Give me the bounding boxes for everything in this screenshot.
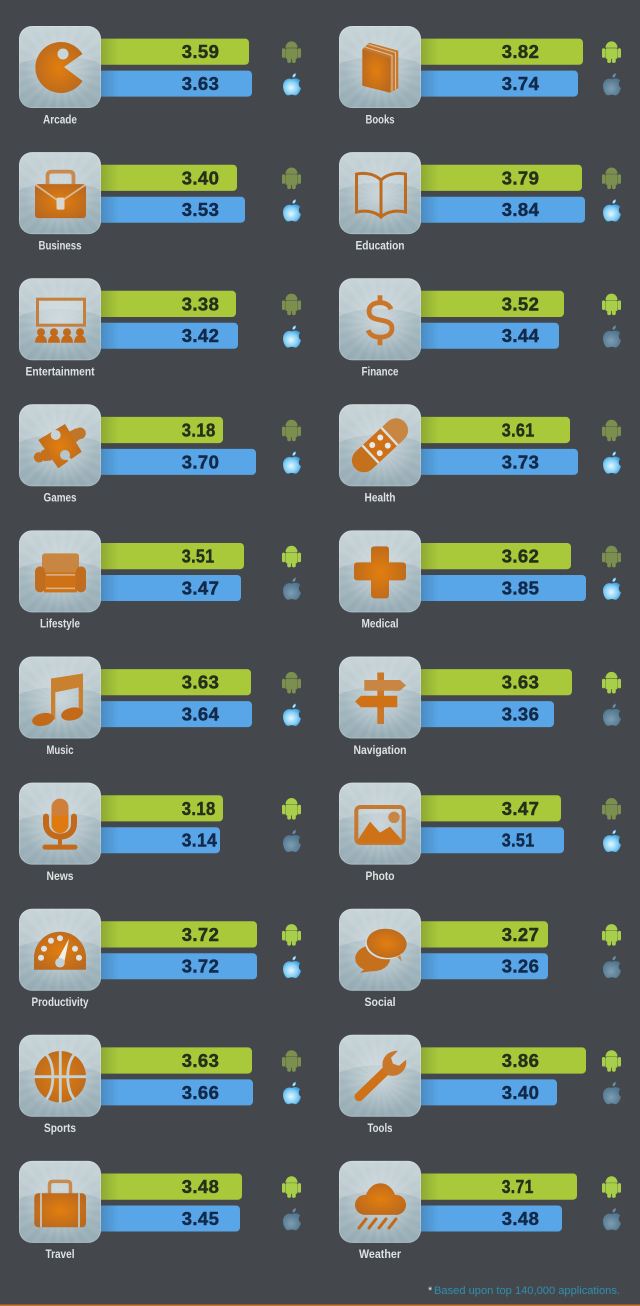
- label: Lifestyle: [40, 617, 80, 631]
- android bar: [97, 165, 237, 191]
- ios bar: [97, 323, 238, 349]
- ios bar: 3.51: [502, 830, 535, 851]
- icon tile: rain cloud: [339, 1161, 421, 1243]
- android bar: 3.52: [502, 293, 539, 314]
- apple icon: [603, 1208, 621, 1230]
- ios bar: 3.63: [182, 73, 219, 94]
- android icon: [602, 294, 621, 315]
- android bar: 3.18: [182, 419, 216, 440]
- icon tile: microphone: [19, 783, 101, 865]
- label: Weather: [359, 1247, 401, 1261]
- android bar: 3.63: [182, 672, 219, 693]
- category: Lifestyle: [19, 530, 301, 631]
- category: Books: [339, 26, 621, 126]
- label: News: [46, 869, 74, 883]
- android bar: [417, 1174, 577, 1200]
- android bar: 3.51: [182, 546, 215, 567]
- android icon: [602, 546, 621, 567]
- android bar: [417, 921, 548, 948]
- android bar: [417, 543, 571, 569]
- category: Navigation: [339, 656, 621, 757]
- android bar: 3.72: [182, 924, 219, 945]
- android icon: [602, 672, 621, 694]
- ios bar: 3.40: [502, 1082, 539, 1103]
- apple icon: [603, 451, 621, 474]
- category: Weather: [339, 1161, 621, 1261]
- icon tile: cross: [339, 530, 421, 612]
- android bar: 3.61: [502, 419, 535, 440]
- android bar: 3.79: [502, 167, 539, 188]
- android bar: [97, 921, 257, 948]
- apple icon: [283, 704, 301, 726]
- icon tile: gauge: [19, 909, 101, 991]
- icon tile: armchair: [19, 530, 101, 612]
- android bar: [97, 543, 244, 569]
- category: Music: [19, 656, 301, 757]
- ios bar: [97, 197, 245, 223]
- ios bar: [97, 575, 241, 601]
- android bar: 3.59: [182, 41, 219, 62]
- android icon: [282, 924, 301, 946]
- icon tile: suitcase: [19, 1161, 101, 1243]
- category: Entertainment: [19, 278, 301, 378]
- icon tile: puzzle piece: [19, 404, 101, 486]
- android icon: [602, 924, 621, 946]
- icon tile: wrench: [339, 1035, 421, 1117]
- ios bar: [417, 1206, 562, 1232]
- android bar: 3.40: [182, 167, 219, 188]
- apple icon: [603, 704, 621, 726]
- label: Books: [366, 112, 395, 126]
- label: Social: [364, 995, 396, 1009]
- footnote: *: [428, 1285, 433, 1297]
- label: Tools: [368, 1121, 393, 1135]
- label: Productivity: [32, 995, 89, 1009]
- ios bar: 3.14: [182, 830, 217, 851]
- android bar: [97, 795, 223, 821]
- android icon: [602, 1050, 621, 1072]
- android bar: 3.63: [502, 672, 539, 693]
- ios bar: 3.84: [502, 199, 540, 220]
- label: Health: [364, 491, 396, 505]
- android icon: [602, 168, 621, 189]
- android bar: 3.47: [502, 798, 539, 819]
- label: Finance: [362, 365, 399, 379]
- category: Tools: [339, 1035, 621, 1135]
- label: Entertainment: [26, 365, 95, 379]
- category: Business: [19, 152, 301, 252]
- label: Arcade: [43, 112, 77, 126]
- apple icon: [283, 73, 301, 95]
- label: Music: [46, 743, 74, 757]
- android bar: [97, 669, 251, 695]
- android bar: [97, 1174, 242, 1200]
- android bar: 3.86: [502, 1050, 539, 1071]
- ios bar: 3.36: [502, 704, 539, 724]
- ios bar: [417, 1079, 557, 1105]
- ios bar: [417, 71, 578, 97]
- ios bar: [417, 449, 578, 475]
- ios bar: 3.66: [182, 1082, 219, 1103]
- android bar: 3.18: [182, 798, 216, 819]
- category: Productivity: [19, 909, 301, 1009]
- android icon: [282, 546, 301, 567]
- ios bar: 3.85: [502, 577, 539, 598]
- icon tile: bandage: [339, 404, 421, 486]
- ios bar: [417, 323, 559, 349]
- category: Photo: [339, 783, 621, 883]
- ios bar: 3.73: [502, 451, 539, 472]
- ios bar: 3.48: [502, 1208, 539, 1229]
- category: Education: [339, 152, 621, 252]
- android bar: [417, 165, 582, 191]
- apple icon: [603, 199, 621, 222]
- category: Arcade: [19, 26, 301, 126]
- icon tile: signpost: [339, 656, 421, 738]
- ios bar: 3.53: [182, 199, 219, 220]
- label: Sports: [44, 1121, 76, 1135]
- apple icon: [283, 830, 301, 852]
- apple icon: [603, 1082, 621, 1104]
- label: Games: [44, 491, 77, 505]
- icon tile: dollar sign: [339, 278, 421, 360]
- category: Medical: [339, 530, 621, 631]
- apple icon: [283, 451, 301, 474]
- ios bar: 3.45: [182, 1208, 219, 1229]
- label: Travel: [46, 1247, 74, 1261]
- android bar: [97, 291, 236, 317]
- label: Medical: [362, 617, 398, 631]
- android icon: [282, 1176, 301, 1198]
- ios bar: 3.42: [182, 325, 219, 346]
- apple icon: [283, 325, 301, 348]
- apple icon: [603, 956, 621, 978]
- label: Education: [356, 238, 404, 252]
- apple icon: [283, 199, 301, 222]
- icon tile: briefcase: [19, 152, 101, 234]
- icon tile: picture frame: [339, 783, 421, 865]
- android bar: 3.82: [502, 41, 539, 62]
- ios bar: [417, 701, 554, 727]
- ios bar: 3.70: [182, 451, 219, 472]
- ios bar: 3.72: [182, 956, 219, 977]
- android icon: [602, 1176, 621, 1198]
- apple icon: [603, 325, 621, 348]
- android bar: [417, 417, 570, 443]
- android bar: 3.38: [182, 293, 219, 314]
- category: Social: [339, 909, 621, 1009]
- ios bar: 3.26: [502, 956, 539, 977]
- android icon: [282, 294, 301, 315]
- category: Finance: [339, 278, 621, 378]
- ios bar: [417, 827, 564, 853]
- apple icon: [283, 577, 301, 600]
- apple icon: [603, 577, 621, 600]
- icon tile: basketball: [19, 1035, 101, 1117]
- ios bar: 3.64: [182, 704, 220, 724]
- android bar: [417, 39, 583, 65]
- android bar: [417, 669, 572, 695]
- category: Games: [19, 404, 301, 505]
- ios bar: [417, 953, 548, 979]
- ios bar: 3.74: [502, 73, 540, 94]
- bottom orange rule: [0, 1304, 640, 1306]
- ios bar: 3.47: [182, 577, 219, 598]
- icon tile: cinema screen: [19, 278, 101, 360]
- android bar: [417, 1047, 586, 1074]
- android bar: 3.63: [182, 1050, 219, 1071]
- android bar: [97, 417, 223, 443]
- ios bar: [97, 71, 252, 97]
- icon tile: speech bubbles: [339, 909, 421, 991]
- android bar: [97, 1047, 252, 1074]
- android icon: [282, 168, 301, 189]
- android icon: [282, 798, 301, 820]
- icon tile: open book: [339, 152, 421, 234]
- apple icon: [603, 830, 621, 852]
- category: Health: [339, 404, 621, 505]
- apple icon: [603, 73, 621, 95]
- android icon: [282, 672, 301, 694]
- ios bar: 3.44: [502, 325, 540, 346]
- ios bar: [97, 1206, 240, 1232]
- ios bar: [97, 827, 220, 853]
- android icon: [602, 41, 621, 63]
- android bar: 3.62: [502, 546, 539, 567]
- ios bar: [417, 575, 586, 601]
- apple icon: [283, 1208, 301, 1230]
- android bar: [417, 795, 561, 821]
- android icon: [282, 41, 301, 63]
- ios bar: [97, 953, 257, 979]
- android bar: 3.27: [502, 924, 539, 945]
- category: News: [19, 783, 301, 883]
- footnote: Based upon top 140,000 applications.: [434, 1285, 620, 1297]
- android bar: [417, 291, 564, 317]
- apple icon: [283, 956, 301, 978]
- label: Business: [38, 238, 82, 252]
- ios bar: [97, 1079, 253, 1105]
- android bar: 3.71: [502, 1176, 534, 1197]
- android icon: [282, 1050, 301, 1072]
- ios bar: [97, 701, 252, 727]
- icon tile: pac-man: [19, 26, 101, 108]
- label: Navigation: [354, 743, 406, 757]
- android icon: [602, 798, 621, 820]
- label: Photo: [366, 869, 394, 883]
- category: Sports: [19, 1035, 301, 1135]
- ios bar: [97, 449, 256, 475]
- category: Travel: [19, 1161, 301, 1261]
- icon tile: book: [339, 26, 421, 108]
- android bar: 3.48: [182, 1176, 219, 1197]
- icon tile: music notes: [19, 656, 101, 738]
- android bar: [97, 39, 249, 65]
- android icon: [602, 420, 621, 441]
- apple icon: [283, 1082, 301, 1104]
- ios bar: [417, 197, 585, 223]
- android icon: [282, 420, 301, 441]
